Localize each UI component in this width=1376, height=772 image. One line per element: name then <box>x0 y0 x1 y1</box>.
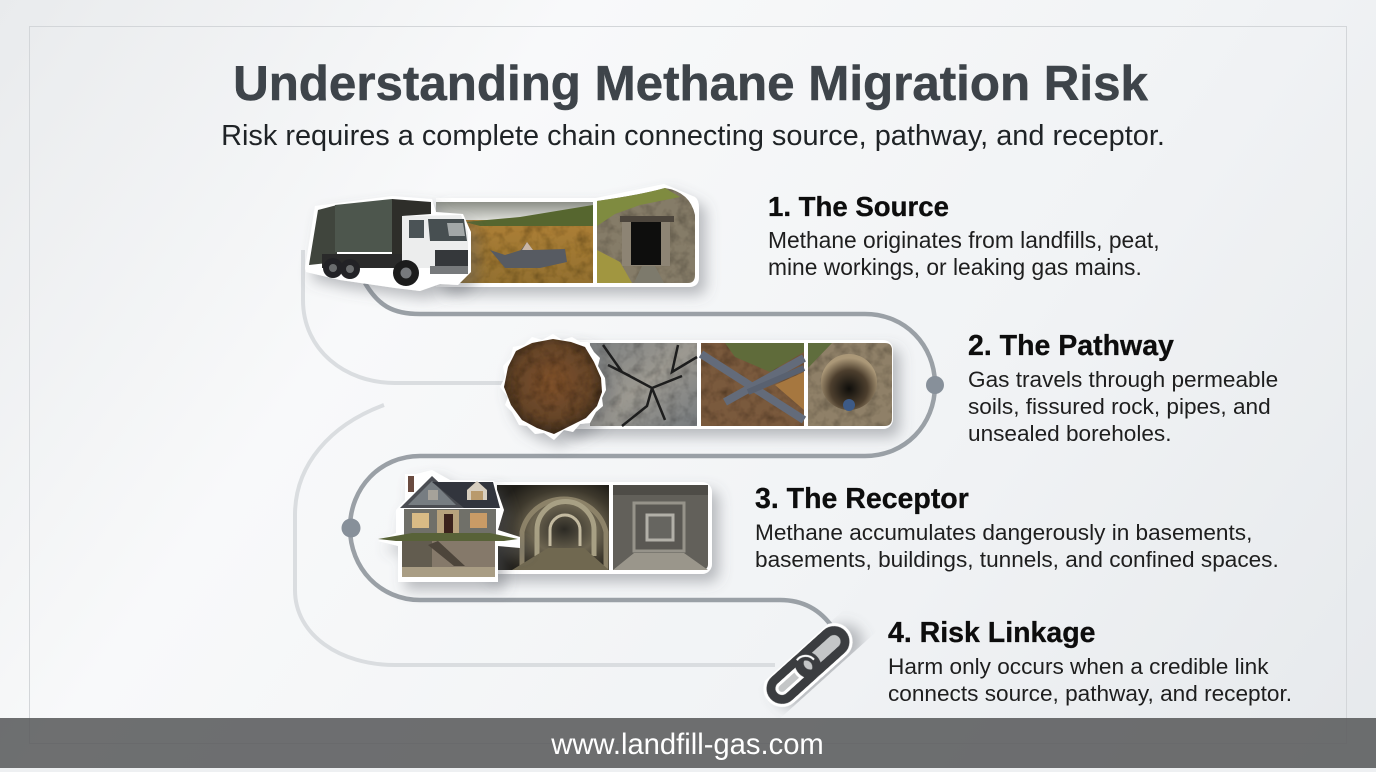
heading: the pathway: 2. The Pathway <box>968 330 1174 362</box>
dark path <box>350 283 935 628</box>
panel: receptor images <box>378 470 712 582</box>
heading: risk linkage: 4. Risk Linkage <box>888 617 1096 649</box>
image: concrete confined space <box>613 485 708 570</box>
description: the receptor <box>755 520 1279 572</box>
text block: risk linkage <box>888 617 1292 706</box>
image: buried pipes <box>701 343 804 426</box>
description: the pathway: Gas travels through permeable <box>968 367 1278 392</box>
description: the source: Methane originates from landfills, peat, <box>768 227 1160 253</box>
text block: the receptor <box>755 483 1279 572</box>
image: peat bog <box>436 202 593 283</box>
text block: the pathway <box>968 330 1278 446</box>
image: soil pile <box>500 334 606 440</box>
path node: pathway <box>926 376 944 394</box>
heading: the receptor: 3. The Receptor <box>755 483 969 515</box>
footer band <box>0 718 1376 768</box>
title: Understanding Methane Migration Risk <box>233 56 1148 111</box>
description: the receptor: basements, buildings, tunnels, and confined spaces. <box>755 547 1279 572</box>
description: the pathway: soils, fissured rock, pipes, and <box>968 394 1271 419</box>
image: borehole <box>808 343 892 426</box>
light path segments <box>295 250 775 665</box>
description: risk linkage <box>888 654 1292 706</box>
icon: chain link <box>766 626 850 704</box>
description: the pathway: unsealed boreholes. <box>968 421 1172 446</box>
heading: the source: 1. The Source <box>768 191 949 222</box>
description: the source <box>768 227 1160 280</box>
image: fissured rock <box>590 343 697 426</box>
description: the receptor: Methane accumulates dangerously in basements, <box>755 520 1252 545</box>
panel: pathway images <box>500 334 893 440</box>
description: risk linkage: Harm only occurs when a credible link <box>888 654 1268 679</box>
description: the source: mine workings, or leaking gas mains. <box>768 254 1142 280</box>
description: risk linkage: connects source, pathway, and receptor. <box>888 681 1292 706</box>
subtitle: Risk requires a complete chain connecting source, pathway, and receptor. <box>221 120 1165 152</box>
text block: the source <box>768 191 1160 280</box>
panel: source images <box>305 184 699 291</box>
footer band: www.landfill-gas.com <box>551 729 824 761</box>
image: house with basement <box>378 470 520 582</box>
image: garbage truck <box>305 196 471 291</box>
image: tunnel <box>497 485 609 570</box>
description: the pathway <box>968 367 1278 446</box>
image: mine entrance <box>597 188 695 283</box>
path node: receptor <box>342 518 360 538</box>
